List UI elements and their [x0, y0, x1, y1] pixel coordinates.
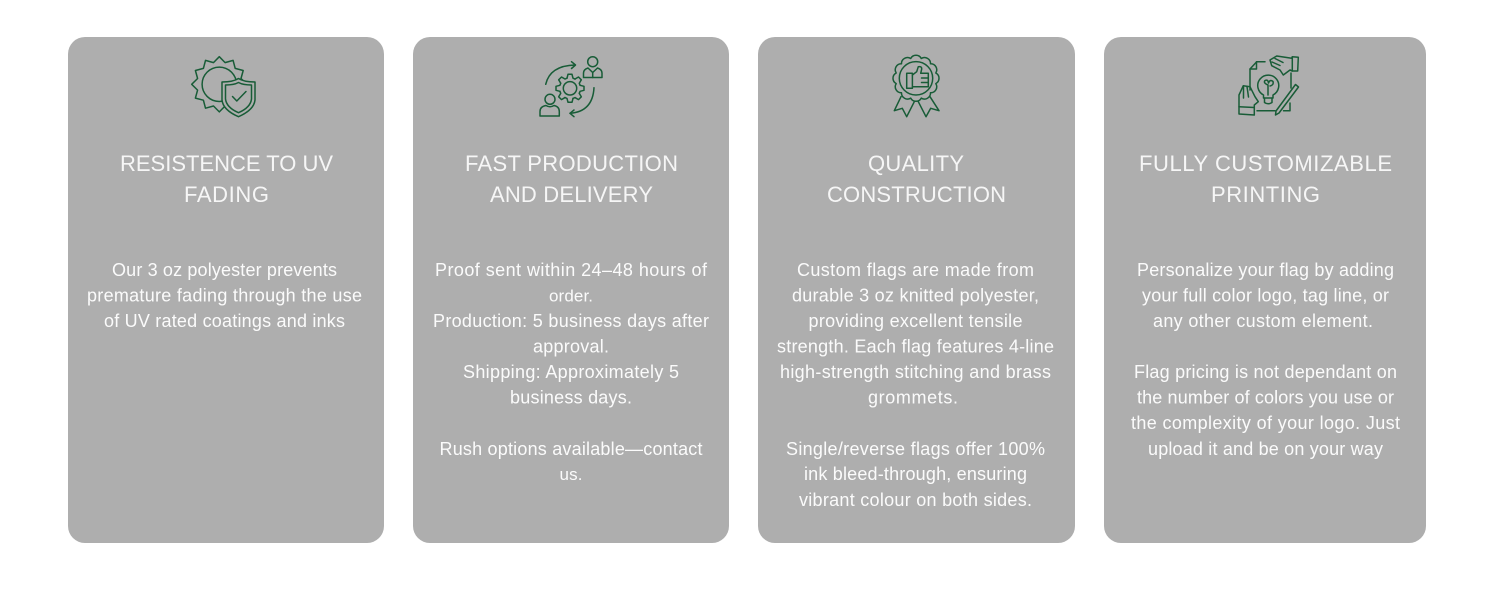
body text: upload it and be on your way — [1148, 439, 1383, 459]
heading — [827, 151, 1006, 207]
body text — [87, 260, 362, 331]
body text: premature fading through the use — [87, 286, 362, 306]
body text: approval. — [533, 337, 609, 357]
body text: any other custom element. — [1153, 311, 1373, 331]
body text: strength. Each flag features 4-line — [777, 337, 1054, 357]
body text — [777, 260, 1054, 510]
body text — [1131, 260, 1400, 459]
heading: PRINTING — [1211, 182, 1320, 207]
heading: FULLY CUSTOMIZABLE — [1139, 151, 1392, 176]
body text: the number of colors you use or — [1137, 388, 1394, 408]
heading — [465, 151, 678, 207]
heading: QUALITY — [868, 151, 964, 176]
body text: Production: 5 business days after — [433, 311, 709, 331]
body text: Personalize your flag by adding — [1137, 260, 1394, 280]
body text: providing excellent tensile — [808, 311, 1022, 331]
body text: Proof sent within 24–48 hours of — [435, 260, 708, 280]
body text: order. — [549, 287, 593, 306]
icon: sun with shield — [192, 57, 255, 117]
panel: fully customizable printing — [1104, 37, 1426, 543]
body text: Our 3 oz polyester prevents — [112, 260, 337, 280]
body text: grommets. — [868, 388, 958, 408]
panel: quality construction — [758, 37, 1075, 543]
heading: RESISTENCE TO UV — [120, 151, 333, 176]
heading — [1139, 151, 1392, 207]
body text: the complexity of your logo. Just — [1131, 413, 1400, 433]
icon: gear, people and arrows — [540, 57, 602, 117]
heading: FAST PRODUCTION — [465, 151, 678, 176]
body text: durable 3 oz knitted polyester, — [792, 286, 1039, 306]
body text: of UV rated coatings and inks — [104, 311, 345, 331]
heading — [120, 151, 333, 207]
body text — [433, 260, 709, 484]
body text: Single/reverse flags offer 100% — [786, 439, 1045, 459]
body text: Rush options available—contact — [440, 439, 702, 459]
icon: rosette with thumbs up — [893, 55, 939, 117]
body text: Custom flags are made from — [797, 260, 1034, 280]
body text: us. — [560, 465, 582, 484]
body text: your full color logo, tag line, or — [1142, 286, 1389, 306]
heading: FADING — [184, 182, 269, 207]
body text: high-strength stitching and brass — [780, 362, 1051, 382]
body text: Shipping: Approximately 5 — [463, 362, 679, 382]
body text: vibrant colour on both sides. — [799, 490, 1032, 510]
body text: business days. — [510, 388, 632, 408]
heading: CONSTRUCTION — [827, 182, 1006, 207]
heading: AND DELIVERY — [490, 182, 653, 207]
icon: hands, page, light bulb and pen — [1239, 56, 1298, 115]
panel: fast production and delivery — [413, 37, 729, 543]
panel: resistance to UV fading — [68, 37, 384, 543]
body text: Flag pricing is not dependant on — [1134, 362, 1397, 382]
body text: ink bleed-through, ensuring — [804, 464, 1027, 484]
